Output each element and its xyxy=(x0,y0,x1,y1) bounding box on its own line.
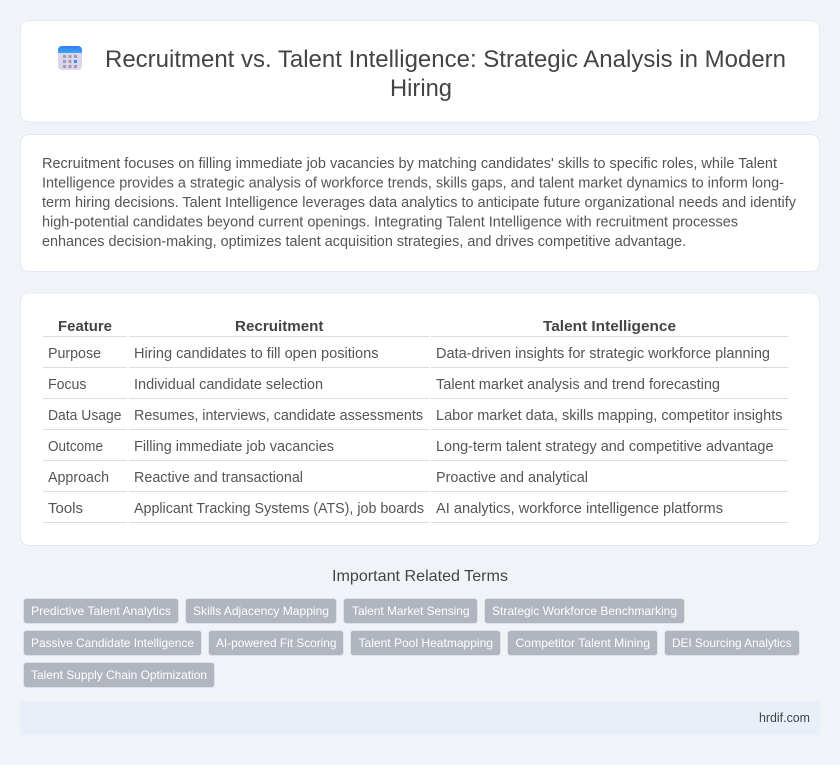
table row: Tools: Applicant Tracking Systems (ATS), job boards xyxy=(134,501,424,517)
icon: calendar xyxy=(58,46,82,70)
text block: summary paragraph: high-potential candidates beyond current openings. Integrating Talent Intelligence with recruitment processes xyxy=(42,214,738,230)
text block: summary paragraph xyxy=(42,156,797,250)
table row: Tools: AI analytics, workforce intelligence platforms xyxy=(436,501,723,517)
table header row: Recruitment xyxy=(235,318,324,335)
table row: Approach: Approach xyxy=(48,470,109,486)
heading: related terms: Important Related Terms xyxy=(332,568,508,585)
footer xyxy=(20,701,820,735)
table row: Approach: Proactive and analytical xyxy=(436,470,588,486)
table row: Purpose: Purpose xyxy=(48,346,101,362)
chip xyxy=(24,662,214,688)
chip: Talent Supply Chain Optimization xyxy=(31,668,207,682)
title xyxy=(105,46,786,102)
table header row xyxy=(58,318,676,335)
chip xyxy=(344,598,478,624)
table row: Data Usage: Labor market data, skills mapping, competitor insights xyxy=(436,408,782,424)
table header row: Feature xyxy=(58,318,112,335)
chip xyxy=(24,598,178,624)
table row: Data Usage xyxy=(48,408,782,424)
chip: Talent Pool Heatmapping xyxy=(358,636,493,650)
chip: Competitor Talent Mining xyxy=(516,636,650,650)
table row: Tools xyxy=(48,501,723,517)
text block: summary paragraph: enhances decision-making, optimizes talent acquisition strategies, and drives competitive advantage. xyxy=(42,234,686,250)
table row: Focus: Talent market analysis and trend forecasting xyxy=(436,377,720,393)
title: Recruitment vs. Talent Intelligence: Strategic Analysis in Modern xyxy=(105,46,786,73)
chip: Skills Adjacency Mapping xyxy=(193,604,329,618)
footer: hrdif.com xyxy=(759,710,810,725)
table row: Data Usage: Resumes, interviews, candidate assessments xyxy=(134,408,423,424)
panel: comparison table xyxy=(20,293,820,546)
table row: Focus: Individual candidate selection xyxy=(134,377,323,393)
panel: header xyxy=(20,20,820,122)
table row: Purpose xyxy=(48,346,770,362)
table row: Focus: Focus xyxy=(48,377,86,393)
table row: Purpose: Hiring candidates to fill open positions xyxy=(134,346,378,362)
table row: Focus xyxy=(48,377,720,393)
table row: Outcome: Outcome xyxy=(48,439,103,455)
chip: Strategic Workforce Benchmarking xyxy=(492,604,677,618)
chip xyxy=(186,598,336,624)
related terms chips xyxy=(24,598,800,688)
chip: Predictive Talent Analytics xyxy=(31,604,171,618)
table row: Approach: Reactive and transactional xyxy=(134,470,303,486)
table row: Approach xyxy=(48,470,588,486)
table row: Outcome xyxy=(48,439,774,455)
table row: Outcome: Long-term talent strategy and competitive advantage xyxy=(436,439,774,455)
table row: Tools: Tools xyxy=(48,501,83,517)
chip xyxy=(350,630,500,656)
title: Hiring xyxy=(390,75,452,102)
chip xyxy=(208,630,344,656)
table row: Outcome: Filling immediate job vacancies xyxy=(134,439,334,455)
chip: Talent Market Sensing xyxy=(352,604,470,618)
chip: DEI Sourcing Analytics xyxy=(672,636,792,650)
chip: AI-powered Fit Scoring xyxy=(216,636,336,650)
chip: Passive Candidate Intelligence xyxy=(31,636,194,650)
panel: description xyxy=(20,134,820,272)
chip xyxy=(484,598,684,624)
table header row: Talent Intelligence xyxy=(543,318,676,335)
text block: summary paragraph: Recruitment focuses on filling immediate job vacancies by matching candidates' skills to specific roles, while Talent xyxy=(42,156,777,172)
text block: summary paragraph: Intelligence provides a strategic analysis of workforce trends, skills gaps, and talent market dynamics to inform long- xyxy=(42,176,784,192)
table row: Purpose: Data-driven insights for strategic workforce planning xyxy=(436,346,770,362)
chip xyxy=(24,630,202,656)
text block: summary paragraph: term hiring decisions. Talent Intelligence leverages data analytics to anticipate future organizational needs and identify xyxy=(42,195,797,211)
chip xyxy=(508,630,658,656)
chip xyxy=(664,630,800,656)
table row: Data Usage: Data Usage xyxy=(48,408,122,424)
